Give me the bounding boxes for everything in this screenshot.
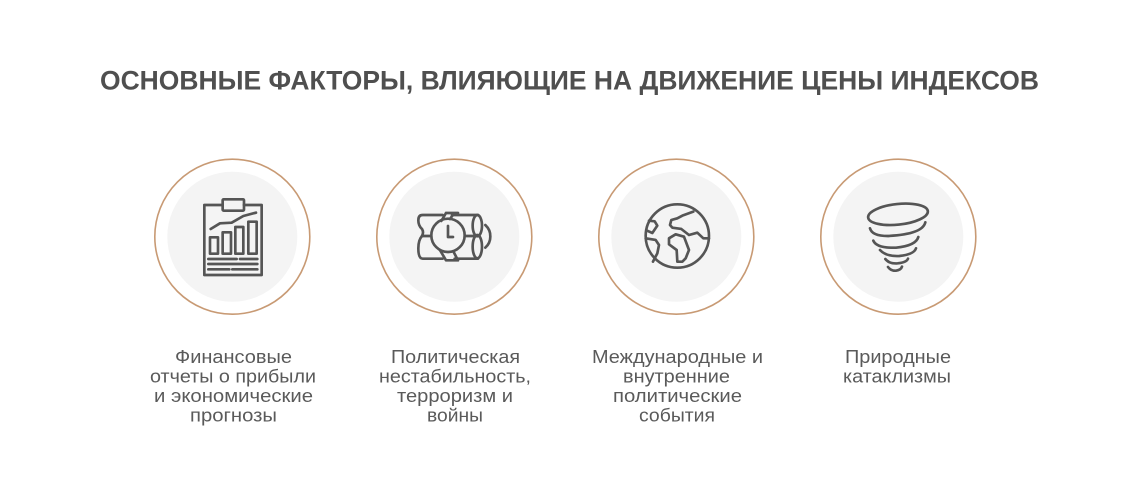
inner disc (833, 172, 963, 302)
caption: political instability: войны (427, 406, 483, 426)
icon: time bomb (418, 213, 490, 260)
caption: natural disasters: катаклизмы (843, 367, 951, 387)
caption: political instability: Политическая (391, 347, 520, 367)
caption: natural disasters: Природные (845, 347, 951, 367)
outer ring (155, 159, 310, 314)
caption: financial reports: Финансовые (175, 347, 292, 367)
outer ring (821, 159, 976, 314)
caption: international events: события (639, 406, 715, 426)
outer ring (599, 159, 754, 314)
inner disc (389, 172, 519, 302)
title: ОСНОВНЫЕ ФАКТОРЫ, ВЛИЯЮЩИЕ НА ДВИЖЕНИЕ ЦЕНЫ ИНДЕКСОВ (100, 66, 1039, 96)
icon: tornado (867, 201, 929, 271)
panel: natural disasters (821, 159, 976, 387)
caption: international events: политические (613, 386, 742, 406)
panel: financial reports (150, 159, 316, 426)
inner disc (167, 172, 297, 302)
caption: financial reports: отчеты о прибыли (150, 367, 316, 387)
caption: international events: внутренние (623, 367, 730, 387)
caption: natural disasters (843, 347, 951, 387)
panel: international events (592, 159, 763, 426)
outer ring (377, 159, 532, 314)
icon: clipboard with chart (204, 199, 262, 275)
caption: political instability: нестабильность, (379, 367, 531, 387)
panel: political instability (377, 159, 532, 426)
caption: political instability (379, 347, 531, 426)
caption: financial reports (150, 347, 316, 426)
caption: international events: Международные и (592, 347, 763, 367)
caption: international events (592, 347, 763, 426)
caption: political instability: терроризм и (397, 386, 513, 406)
caption: financial reports: и экономические (154, 386, 313, 406)
caption: financial reports: прогнозы (190, 406, 277, 426)
inner disc (611, 172, 741, 302)
icon: globe (646, 204, 709, 268)
